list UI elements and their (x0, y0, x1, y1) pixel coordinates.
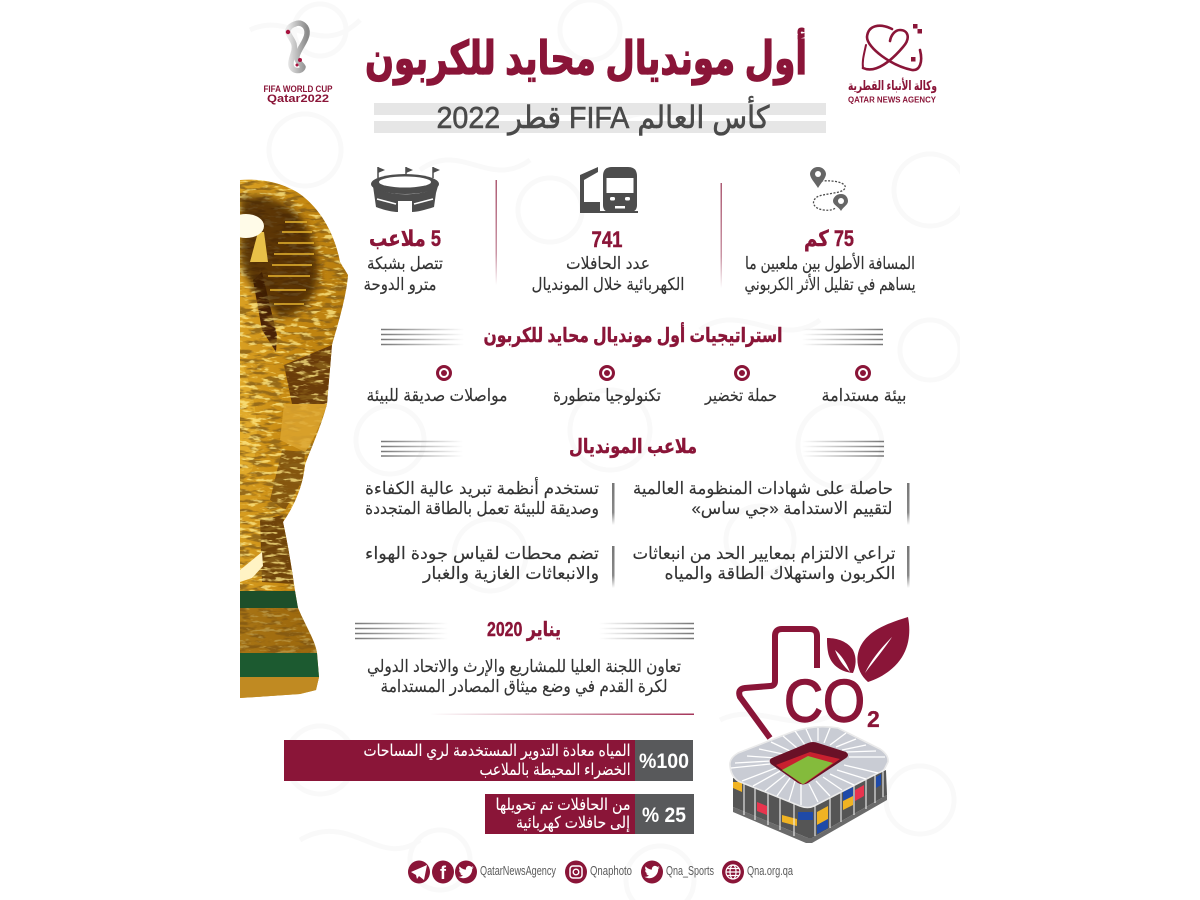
bullet: eco-friendly transport: مواصلات صديقة للبيئة (366, 386, 508, 405)
value: 5 ملاعب (369, 226, 441, 251)
description: عدد الحافلات (566, 254, 650, 273)
handle: Qna.org.qa: Qna.org.qa (747, 864, 793, 878)
CO2 label: 2 (867, 706, 880, 732)
text: January 2020 charter (367, 657, 681, 697)
callout: 25% buses: من الحافلات تم تحويلها (496, 796, 630, 815)
text: January 2020 charter: لكرة القدم في وضع ميثاق المصادر المستدامة (380, 677, 668, 697)
stat: 741 buses (532, 167, 684, 295)
description: المسافة الأطول بين ملعبين ما (745, 253, 915, 273)
stat: 75 km (744, 167, 916, 295)
bullet: sustainable environment (822, 366, 906, 405)
fact: cooling systems (365, 477, 614, 525)
fact: certificates: لتقييم الاستدامة «جي ساس» (692, 499, 892, 519)
fact: air quality: والانبعاثات الغازية والغبار (422, 564, 599, 583)
callout: 100% recycled water (284, 740, 693, 781)
handle: Qna_Sports: Qna_Sports (666, 864, 714, 878)
heading: strategies: استراتيجيات أول مونديال محايد للكربون (484, 321, 782, 347)
stadium (730, 727, 888, 843)
bullet: greening campaign (704, 366, 777, 405)
bullet: advanced technology: تكنولوجيا متطورة (553, 386, 661, 405)
handle: Qnaphoto: Qnaphoto (590, 864, 632, 878)
emblem year: Qatar2022 (267, 93, 329, 105)
stadium facts (365, 477, 910, 588)
logo: Qatar News Agency (848, 24, 937, 104)
stat: 5 stadiums (364, 167, 443, 294)
fact: emission standards (632, 544, 910, 588)
Qatar outline (739, 629, 817, 738)
icon: telegram (408, 860, 430, 884)
agency arabic name: وكالة الأنباء القطرية (848, 77, 937, 93)
heading: strategies (381, 321, 883, 347)
stat: 75 km: يساهم في تقليل الأثر الكربوني (744, 274, 916, 295)
subtitle: كأس العالم FIFA قطر 2022 (437, 96, 770, 136)
icon: tournament emblem (286, 23, 307, 71)
footer: social links (408, 860, 793, 884)
logo: FIFA World Cup Qatar 2022 (264, 23, 333, 105)
icon: instagram (565, 860, 587, 884)
CO2 label: CO (784, 668, 865, 734)
fact: cooling systems: وصديقة للبيئة تعمل بالطاقة المتجددة (365, 499, 599, 518)
icon: route (810, 167, 848, 211)
stat: 741 buses: الكهربائية خلال المونديال (532, 275, 684, 295)
trophy (240, 180, 348, 698)
icon: globe (722, 860, 744, 884)
background pattern (250, 0, 966, 900)
callout: 25% buses: إلى حافلات كهربائية (516, 814, 630, 833)
handle: QatarNewsAgency: QatarNewsAgency (480, 864, 557, 878)
fact: certificates (633, 479, 910, 525)
heading: January 2020 (355, 619, 694, 641)
fact: air quality: تضم محطات لقياس جودة الهواء (365, 544, 599, 564)
value: 741 (592, 227, 622, 252)
bullet: eco-friendly transport (366, 366, 508, 405)
icon: twitter (455, 860, 477, 884)
heading: stadiums: ملاعب المونديال (569, 436, 697, 458)
fact: certificates: حاصلة على شهادات المنظومة العالمية (633, 479, 893, 499)
callout: 100% recycled water: %100 (639, 750, 689, 773)
title: أول مونديال محايد للكربون (365, 28, 807, 85)
callout: 25% buses (485, 794, 694, 834)
agency english name: QATAR NEWS AGENCY (848, 96, 937, 104)
illustration: CO2 stadium (730, 617, 909, 843)
divider (496, 180, 497, 285)
icon: twitter sports (641, 860, 663, 884)
text: January 2020 charter: تعاون اللجنة العليا للمشاريع والإرث والاتحاد الدولي (367, 657, 681, 677)
bullet: greening campaign: حملة تخضير (704, 386, 777, 405)
value: 75 كم (804, 226, 854, 251)
icon: facebook (432, 860, 454, 884)
icon: stadium (371, 167, 440, 212)
callout: 100% recycled water: المياه معادة التدوير المستخدمة لري المساحات (364, 742, 630, 761)
subtitle (374, 96, 826, 136)
callout: 100% recycled water: الخضراء المحيطة بالملاعب (480, 761, 630, 780)
heading: stadiums (381, 436, 884, 458)
icon: facebook: f (440, 863, 447, 883)
icon: train (580, 167, 638, 213)
description: تتصل بشبكة (367, 254, 443, 273)
fact: air quality (365, 544, 614, 588)
divider (720, 183, 722, 288)
heading: January 2020: يناير 2020 (487, 619, 561, 641)
bullet: sustainable environment: بيئة مستدامة (822, 386, 906, 405)
icon: leaves (827, 617, 909, 682)
fact: emission standards: تراعي الالتزام بمعايير الحد من انبعاثات (632, 544, 896, 564)
fact: cooling systems: تستخدم أنظمة تبريد عالية الكفاءة (365, 477, 599, 498)
icon: QNA emblem (863, 24, 922, 70)
bullet: advanced technology (553, 366, 661, 405)
callout: 25% buses: 25 % (642, 804, 686, 827)
emblem text: FIFA WORLD CUP (264, 84, 333, 95)
strategy list (366, 366, 906, 405)
stat: 5 stadiums: مترو الدوحة (364, 275, 436, 294)
fact: emission standards: الكربون واستهلاك الطاقة والمياه (664, 564, 896, 584)
